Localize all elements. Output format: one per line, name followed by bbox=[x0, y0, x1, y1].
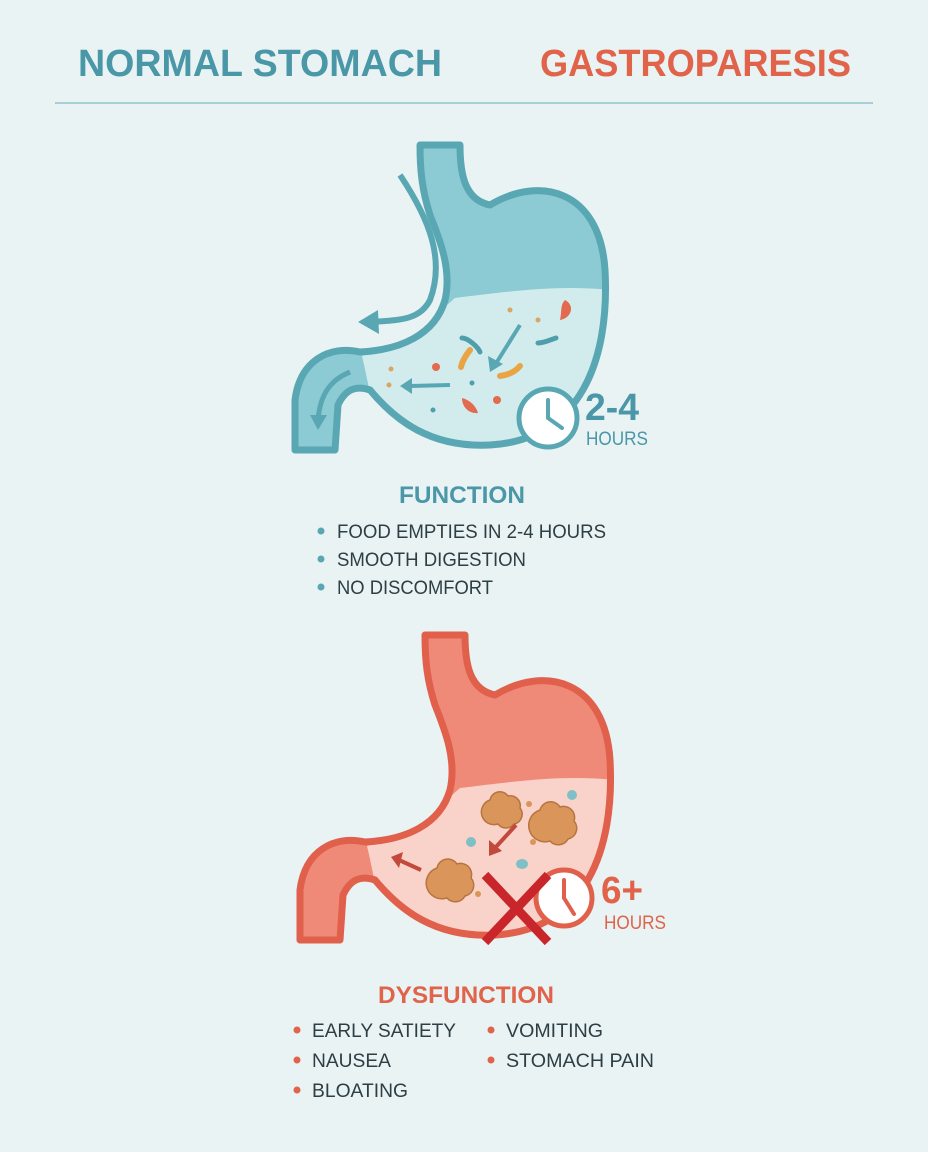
heading: dysfunction: DYSFUNCTION bbox=[378, 982, 554, 1009]
icon: clock 6+ bbox=[536, 870, 592, 926]
list: function: FOOD EMPTIES IN 2-4 HOURS bbox=[337, 522, 606, 543]
illustration: gastroparesis stomach bbox=[300, 635, 615, 950]
icon: clock 2-4 bbox=[519, 389, 577, 447]
list: function bbox=[318, 522, 606, 599]
label: 6+ hours: HOURS bbox=[604, 913, 666, 934]
food particles bbox=[560, 300, 571, 320]
list: dysfunction: STOMACH PAIN bbox=[506, 1051, 654, 1072]
food clumps bbox=[426, 792, 577, 902]
label: 6+ hours: 6+ bbox=[601, 870, 643, 912]
list: function: NO DISCOMFORT bbox=[337, 578, 493, 599]
list: dysfunction: BLOATING bbox=[312, 1081, 408, 1102]
icon: red x bbox=[485, 875, 548, 942]
list: dysfunction: NAUSEA bbox=[312, 1051, 391, 1072]
label: 2-4 hours: 2-4 bbox=[585, 387, 639, 429]
title: normal stomach: NORMAL STOMACH bbox=[78, 43, 442, 85]
label: 6+ hours bbox=[601, 870, 666, 934]
list: dysfunction: VOMITING bbox=[506, 1021, 603, 1042]
arrows bbox=[372, 175, 436, 322]
illustration: normal stomach bbox=[295, 145, 610, 460]
label: 2-4 hours: HOURS bbox=[586, 429, 648, 450]
label: 2-4 hours bbox=[585, 387, 648, 450]
list: dysfunction: EARLY SATIETY bbox=[312, 1021, 456, 1042]
list: function: SMOOTH DIGESTION bbox=[337, 550, 526, 571]
title: gastroparesis: GASTROPARESIS bbox=[540, 43, 851, 85]
list: dysfunction bbox=[294, 1021, 654, 1102]
heading: function: FUNCTION bbox=[399, 482, 525, 509]
